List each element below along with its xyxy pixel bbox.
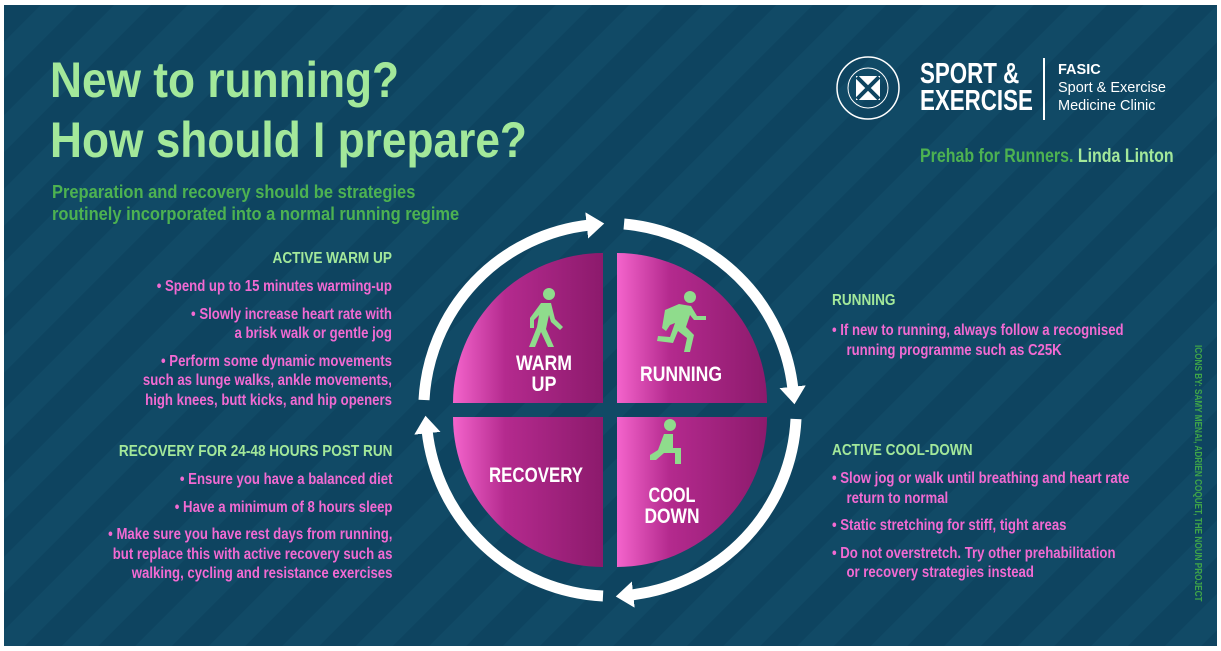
panel: active warm up: a brisk walk or gentle jog (235, 325, 392, 342)
panel: active cool-down: • Static stretching for stiff, tight areas (832, 517, 1066, 534)
quadrant: cool down (617, 417, 767, 567)
quadrant: running (617, 253, 767, 403)
subtitle: Preparation and recovery should be strategies (52, 182, 415, 202)
subtitle: routinely incorporated into a normal running regime (52, 204, 459, 224)
quadrant: cool down: DOWN (644, 505, 700, 528)
panel: recovery: • Ensure you have a balanced diet (179, 471, 392, 488)
credit line: Prehab for Runners. Linda Linton (920, 146, 1174, 167)
chart: cycle diagram (414, 212, 806, 608)
panel: active warm up: such as lunge walks, ankle movements, (143, 372, 392, 389)
quadrant: warm up: WARM (516, 352, 572, 375)
panel: running (832, 292, 1124, 358)
text: FASIC: FASIC (1058, 62, 1101, 78)
text: sport & exercise (920, 58, 1033, 117)
panel: recovery: • Make sure you have rest days from running, (108, 526, 392, 543)
quadrant: warm up: UP (532, 373, 556, 396)
panel: recovery: • Have a minimum of 8 hours sleep (174, 498, 392, 516)
title (50, 52, 527, 168)
title: How should I prepare? (50, 112, 527, 168)
panel: active cool-down: ACTIVE COOL-DOWN (832, 442, 973, 459)
text: FASIC: Sport & Exercise (1058, 80, 1166, 96)
icon: walking person (529, 288, 563, 347)
panel: recovery: but replace this with active recovery such as (112, 546, 392, 562)
panel: active warm up: • Perform some dynamic movements (161, 352, 392, 370)
logo block (836, 56, 1166, 120)
text: FASIC: Medicine Clinic (1058, 98, 1156, 114)
quadrant: cool down: COOL (648, 484, 696, 507)
panel: active cool-down (832, 442, 1129, 581)
panel: active cool-down: • Do not overstretch. Try other prehabilitation (832, 544, 1116, 562)
icon: stretching person (650, 419, 681, 464)
icon: running person (657, 291, 706, 352)
panel: active cool-down: • Slow jog or walk until breathing and heart rate (832, 470, 1129, 487)
panel: active cool-down: or recovery strategies instead (846, 564, 1034, 581)
panel: active warm up (143, 250, 392, 408)
panel: active warm up: ACTIVE WARM UP (273, 250, 392, 267)
icon: university crest (836, 56, 900, 120)
panel: active warm up: high knees, butt kicks, and hip openers (145, 392, 392, 408)
icon credits: ICONS BY: SAMY MENAI, ADRIEN COQUET, THE NOUN PROJECT (1192, 345, 1204, 601)
quadrant: recovery (453, 417, 603, 567)
panel: running: • If new to running, always follow a recognised (832, 322, 1124, 339)
quadrant: recovery: RECOVERY (489, 464, 583, 487)
panel: recovery: RECOVERY FOR 24-48 HOURS POST RUN (118, 443, 392, 460)
panel: recovery: walking, cycling and resistance exercises (131, 565, 392, 582)
subtitle (52, 182, 459, 224)
panel: recovery (108, 443, 392, 582)
title: New to running? (50, 52, 399, 108)
panel: running: RUNNING (832, 292, 895, 309)
panel: active warm up: • Slowly increase heart rate with (191, 306, 392, 322)
quadrant: warm up (453, 253, 603, 403)
text: sport & exercise: EXERCISE (920, 85, 1033, 117)
panel: active warm up: • Spend up to 15 minutes warming-up (157, 278, 392, 295)
panel: active cool-down: return to normal (846, 490, 948, 506)
text: FASIC (1058, 62, 1166, 114)
quadrant: running: RUNNING (640, 363, 722, 386)
text: sport & exercise: SPORT & (920, 58, 1019, 90)
panel: running: running programme such as C25K (846, 342, 1062, 358)
arrows ring (424, 224, 796, 596)
